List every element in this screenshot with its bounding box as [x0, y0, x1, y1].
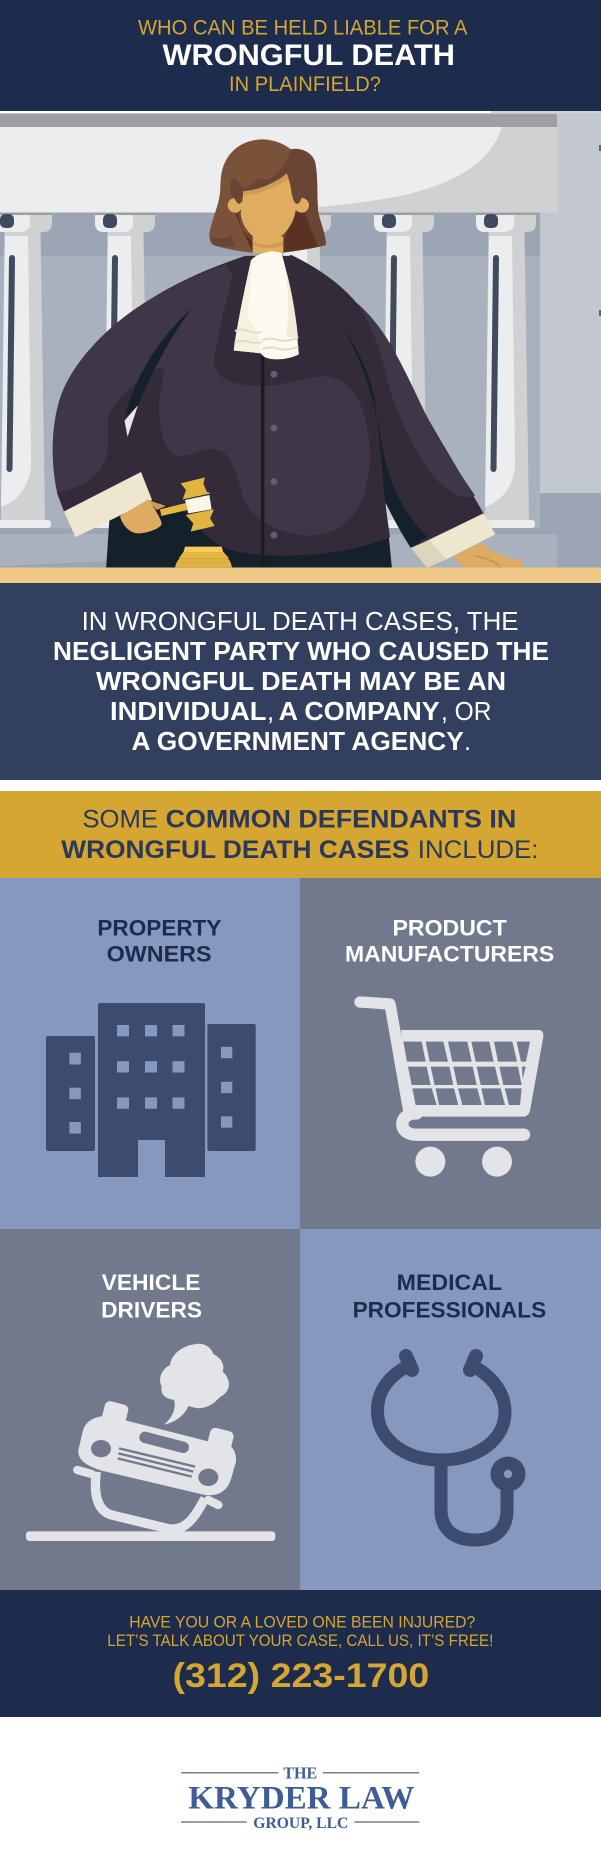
heading line 2 [61, 836, 539, 864]
icon: buildings [46, 1003, 256, 1177]
statement line 5: A GOVERNMENT AGENCY [132, 728, 464, 756]
lower robe [106, 494, 392, 568]
buttons [270, 371, 277, 539]
label: MANUFACTURERS [345, 941, 554, 966]
columns [0, 212, 536, 528]
label: VEHICLE [102, 1270, 200, 1295]
panel: property owners [0, 878, 300, 1229]
heading line 1: COMMON DEFENDANTS IN [166, 806, 516, 834]
footer call to action [0, 1590, 601, 1717]
illustration: courthouse background [0, 111, 601, 568]
label [353, 1270, 546, 1322]
statement line 5: . [464, 728, 471, 756]
icon: overturned car [26, 1344, 275, 1541]
header band [0, 0, 601, 111]
statement line 3: WRONGFUL DEATH MAY BE AN [96, 668, 506, 696]
heading line 2: INCLUDE: [418, 836, 538, 864]
heading line 1: SOME [82, 806, 158, 834]
call to action line 1: HAVE YOU OR A LOVED ONE BEEN INJURED? [129, 1612, 475, 1631]
hair [209, 139, 326, 253]
label [345, 915, 554, 966]
panel: medical professionals [300, 1229, 601, 1590]
label [101, 1270, 202, 1322]
head [209, 139, 326, 253]
panel: vehicle drivers [0, 1229, 300, 1590]
statement line 2: NEGLIGENT PARTY WHO CAUSED THE [53, 638, 549, 666]
statement line 4: A COMPANY [279, 698, 440, 726]
label: PRODUCT [392, 915, 507, 940]
statement line 4: , OR [441, 698, 491, 726]
hand [120, 499, 166, 533]
sounding block [175, 547, 232, 567]
desk edge [0, 568, 601, 583]
right cuff [411, 513, 495, 568]
label [97, 915, 222, 966]
panel: product manufacturers [300, 878, 601, 1229]
header line 1: WHO CAN BE HELD LIABLE FOR A [138, 16, 468, 40]
label: DRIVERS [101, 1297, 202, 1322]
shirt sliver [125, 405, 138, 437]
label: MEDICAL [397, 1270, 502, 1295]
label: PROPERTY [97, 915, 222, 940]
ears and face [228, 173, 309, 242]
label: OWNERS [107, 941, 212, 966]
robe creases [125, 308, 427, 548]
gavel handle [160, 503, 187, 516]
placket line [261, 356, 264, 568]
icon: stethoscope [377, 1356, 526, 1540]
icon: shopping cart [360, 1002, 543, 1177]
robe upper [53, 256, 483, 556]
illustration: judge [53, 139, 495, 568]
statement line 1: IN WRONGFUL DEATH CASES, THE [82, 608, 519, 636]
label: PROFESSIONALS [353, 1297, 546, 1322]
header line 3: IN PLAINFIELD? [229, 73, 381, 96]
heading line 2: WRONGFUL DEATH CASES [61, 836, 409, 864]
left cuff [64, 472, 152, 537]
panel: common defendants heading [0, 791, 601, 878]
logo: The Kryder Law Group, LLC [181, 1764, 419, 1832]
gavel and left hand [120, 477, 232, 567]
statement line 4: , [267, 698, 274, 726]
entablature [0, 114, 558, 212]
logo: The Kryder Law Group, LLC: GROUP, LLC [253, 1815, 348, 1832]
phone number: (312) 223-1700 [172, 1657, 429, 1695]
cravat [234, 251, 299, 359]
header line 2: WRONGFUL DEATH [162, 39, 455, 72]
neck [253, 237, 283, 253]
statement line 4: INDIVIDUAL [110, 698, 266, 726]
logo: The Kryder Law Group, LLC: KRYDER LAW [188, 1780, 414, 1816]
body [53, 251, 495, 568]
robe light shading [53, 264, 370, 536]
logo: The Kryder Law Group, LLC: THE [283, 1764, 317, 1783]
right hand [453, 543, 523, 567]
call to action line 2: LET’S TALK ABOUT YOUR CASE, CALL US, IT’S FREE! [107, 1631, 493, 1650]
gavel head [181, 477, 215, 532]
panel: negligent party statement [0, 583, 601, 780]
statement line 4 [110, 698, 491, 726]
